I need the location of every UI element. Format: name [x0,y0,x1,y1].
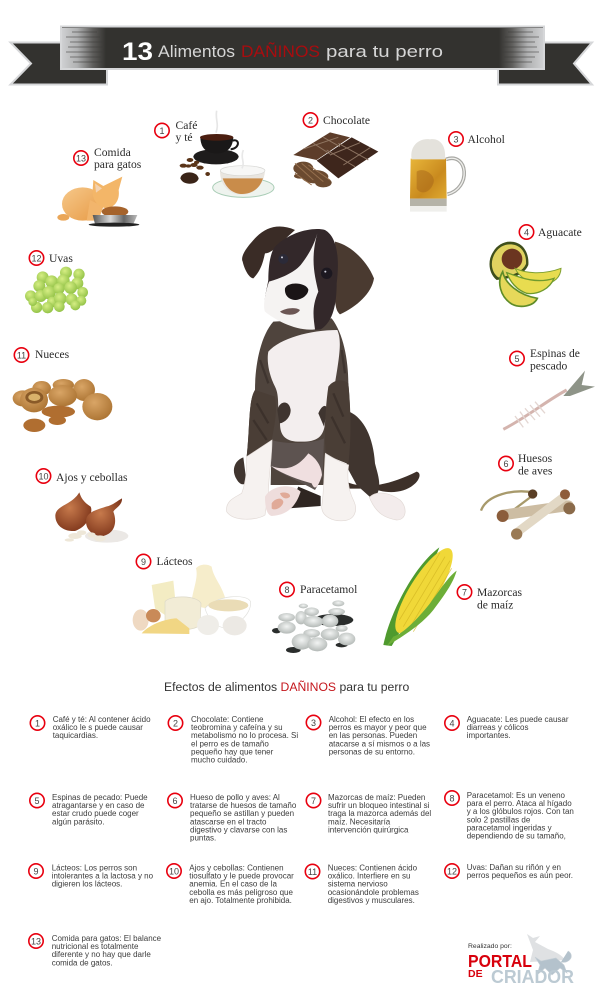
logo word DE: DE [468,968,483,980]
rear paw [369,493,405,520]
label: paracetamol: Paracetamol [300,583,357,596]
effect 13: comida de gatos. [52,958,113,967]
effect 9 [29,864,154,889]
effect 5: Espinas de pecado: Puede [52,793,148,802]
effect 2: mucho cuidado. [191,756,247,764]
effect 2 [168,715,298,764]
effect 3: atacarse a sí mismos o a las [329,739,430,748]
icon: coffee, tea [180,111,274,197]
tail [348,472,420,492]
effect 6: pequeño se astillan y pueden [190,809,294,818]
effect 12: Uvas: Dañan su riñón y en [467,863,561,872]
logo dog silhouette [527,934,565,962]
effect 7: maíz. Necesitaría [328,817,391,826]
panel: food 10 garlic and onions [36,469,128,543]
label: café y té: Café [176,119,197,132]
icon: dairy products [133,565,251,635]
icon: corn cob [383,541,462,646]
effect 12: perros pequeños es aún peor. [467,871,573,880]
effect 8 [445,791,574,840]
label: espinas de pescado: pescado [530,360,568,372]
effect 6: Hueso de pollo y aves: Al [190,793,280,802]
panel: food 5 fish bones [503,347,595,429]
label: espinas de pescado: Espinas de [530,347,580,360]
effect 5: atragantarse y en caso de [52,801,145,810]
kitten head [93,177,122,208]
effect 5: 5 [34,796,40,806]
rear haunches [234,412,379,500]
ribbon shape [10,26,592,84]
label: alcohol: Alcohol [468,133,505,146]
title text: Alimentos [158,42,235,61]
icon: chocolate bars [293,132,378,187]
effect 2: teobromina y cafeína y su [191,723,283,732]
effect 8: paracetamol ingeridas y [467,823,552,832]
panel: food 2 chocolate [293,113,378,187]
kitten body [62,187,103,221]
title text: DAÑINOS [241,42,320,61]
effect 12: 12 [447,866,457,876]
label: mazorcas de maíz: de maíz [477,598,513,612]
effect 8: dependiendo de su tamaño, [467,832,566,840]
label: comida para gatos: para gatos [94,158,142,171]
label: nueces: Nueces [35,348,70,361]
effect 13: Comida para gatos: El balance [52,934,161,943]
chest [268,330,340,442]
effect 8: solo 2 pastillas de [467,815,531,824]
effect 11: ocasionándole problemas [328,888,419,897]
effect 6 [168,793,297,842]
effect 10 [167,864,294,905]
right foreleg white [322,453,356,521]
panel: food 6 poultry bones [481,452,575,540]
logo word PORTAL: PORTAL [468,951,532,971]
effect 4: 4 [449,718,455,728]
logo credit: Realizado por: [468,943,512,950]
head dark [265,229,338,330]
badge 7: 7 [462,588,467,598]
title text [122,38,443,66]
effect 9: Lácteos: Los perros son [52,864,137,872]
panel: food 9 dairy [133,554,251,635]
effect 3: 3 [311,718,316,728]
icon: bones [481,489,575,540]
title text: 13 [122,38,153,66]
icon: kitten with bowl [57,177,139,227]
label: mazorcas de maíz: Mazorcas [477,586,522,599]
panel: food 11 nuts [13,348,112,432]
effect 6: 6 [172,796,178,806]
icon: fish bone [503,371,595,429]
effect 11: 11 [308,867,317,877]
effect 6: digestivo y clavarse con las [190,825,287,834]
kitten front leg [87,200,103,221]
effect 1: 1 [35,718,40,728]
badge 9: 9 [141,557,146,567]
title banner [10,26,592,84]
pink belly [271,453,322,487]
effect 4: Aguacate: Les puede causar [467,715,569,724]
label: lácteos: Lácteos [156,555,193,568]
badge 8: 8 [284,585,290,595]
effect 11: Nueces: Contienen ácido [328,864,417,872]
panel: food 12 grapes [25,251,88,313]
effect 13: 13 [31,936,41,946]
section heading: effects: Efectos de alimentos DAÑINOS para tu perro [164,680,409,694]
effect 4: importantes. [467,731,511,740]
label: café y té: y té [176,131,193,144]
effect 8: para el perro. Ataca al hígado [467,799,572,808]
effect 7: intervención quirúrgica [328,825,409,834]
eyes [278,254,332,279]
badge 13: 13 [76,154,86,164]
panel: food 3 alcohol [410,132,505,212]
panel: food 1 coffee and tea [155,111,274,197]
effect 11: sistema nervioso [328,880,388,889]
centre paw [265,486,301,516]
effect 10: en ajo. Totalmente prohibida. [189,896,292,905]
effect 1: oxálico le s puede causar [53,723,143,732]
effect 7: sufrir un bloqueo intestinal si [328,801,430,810]
left ear [242,227,295,278]
logo: Portal de Criador [468,934,574,987]
effect 4: diarreas y cólicos [467,723,529,732]
torso [247,318,350,485]
brindle stripes [253,350,345,443]
label: comida para gatos: Comida [94,146,131,159]
effect 6: tratarse de huesos de tamaño [190,801,297,810]
badge 6: 6 [503,459,509,469]
effect 7: traga la mazorca además del [328,809,431,818]
effect 1: Café y té: Al contener ácido [53,715,151,724]
effect 2: 2 [173,718,178,728]
effect 4 [445,715,569,740]
badge 1: 1 [159,126,165,136]
white blaze and muzzle [264,233,318,330]
effect 11 [305,864,419,905]
effect 7: Mazorcas de maíz: Pueden [328,793,425,802]
effect 13: diferente y no hay que darle [52,950,151,959]
effect 5: algún parásito. [52,817,104,826]
effect 1: taquicardias. [53,731,98,740]
effect 3 [306,715,430,756]
left foreleg white [227,440,272,519]
effect 10: Ajos y cebollas: Contienen [189,864,284,872]
icon: pills [272,600,355,653]
logo cat silhouette [535,951,571,975]
effect 3: en las personas. Pueden [329,731,417,740]
effect 2: metabolismo no lo procesa. Si [191,731,298,740]
label: aguacate: Aguacate [538,226,582,239]
badge 10: 10 [38,472,49,482]
effect 10: anemia. En el caso de la [189,880,277,889]
effect 13 [29,934,162,967]
right ear [333,242,374,314]
effect 3: Alcohol: El efecto en los [329,715,414,724]
effect 2: el perro es de tamaño [191,739,269,748]
effect 6: atascarse en el tracto [190,817,267,826]
effect 8: Paracetamol: Es un veneno [467,791,565,800]
kitten inner ear [95,183,102,193]
effect 2: Chocolate: Contiene [191,715,264,724]
badge 4: 4 [524,228,529,238]
effect 13: nutricional es totalmente [52,942,139,951]
effect 3: personas de su entorno. [329,747,415,756]
effects list [29,715,574,967]
icon: onions [55,492,128,543]
effect 9: 9 [33,866,39,876]
effect 3: perros es mayor y peor que [329,723,427,732]
icon: beer mug [410,139,464,212]
panel: food 7 corn [383,541,523,646]
effect 9: intolerantes a la lactosa y no [52,872,154,881]
belly [271,438,324,490]
mouth [280,308,300,315]
effect 7: 7 [311,796,316,806]
steel bowl [93,215,137,226]
cat food [102,206,128,217]
effect 5: estar crudo puede coger [52,809,139,818]
icon: avocado [489,242,561,306]
label: uvas: Uvas [49,252,73,265]
effect 7 [306,793,431,834]
paw pads [272,493,290,509]
badge 3: 3 [453,134,459,144]
effect 5 [30,793,148,826]
effect 8: y a los glóbulos rojos. Con tan [467,807,574,816]
nose [285,283,308,300]
kitten tail [57,214,69,221]
effect 10: tiosulfato y le puede provocar [189,872,294,881]
effect 1 [30,715,151,740]
effect 8: 8 [449,794,455,804]
label: huesos de aves: de aves [518,464,553,478]
badge 12: 12 [31,254,42,264]
badge 5: 5 [514,354,520,364]
forelegs brindle [247,380,350,464]
title text: para tu perro [326,42,443,61]
panel: food 13 cat food [57,146,142,227]
effect 11: oxálico. Interfiere en su [328,872,410,881]
panel: food 8 paracetamol [272,582,357,653]
effect 12 [445,863,573,880]
effect 6: puntas. [190,834,216,842]
badge 2: 2 [308,116,313,126]
logo word CRIADOR: CRIADOR [491,966,574,987]
effect 10: cebolla es más peligroso que [189,888,293,897]
icon: green grapes [25,267,88,313]
back leg dark [288,487,321,508]
icon: walnuts [13,379,112,432]
central dog photo [227,227,420,521]
panel: food 4 avocado [489,225,582,306]
label: chocolate: Chocolate [323,114,370,127]
chest patches [277,402,327,427]
effect 10: 10 [169,866,179,876]
label: huesos de aves: Huesos [518,452,552,465]
effect 9: digieren los lácteos. [52,880,122,889]
badge 11: 11 [17,350,26,360]
label: ajos y cebollas: Ajos y cebollas [56,471,128,484]
effect 2: pequeño hay que tener [191,747,274,756]
effect 11: digestivos y musculares. [328,896,415,905]
